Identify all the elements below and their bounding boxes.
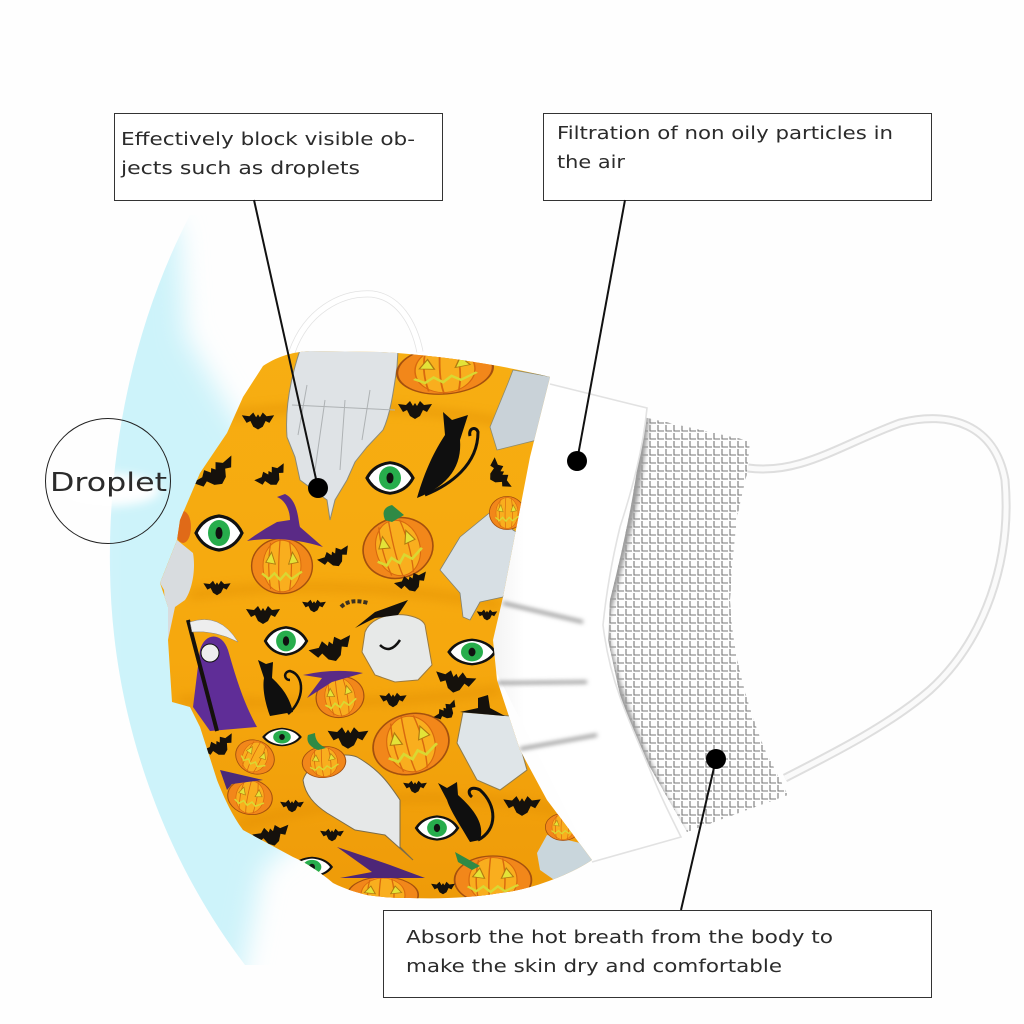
leader line: inner layer [681,749,726,910]
ghost centre closed eye [380,640,400,649]
black cats [417,412,468,498]
callout: absorb: make the skin dry and comfortable [406,956,782,977]
fabric folds [180,407,560,825]
reaper [193,636,257,731]
callout: block droplets [114,114,442,200]
ghost left [160,540,194,640]
white filter layer [480,384,681,862]
callout: block droplets: jects such as droplets [120,158,360,179]
ghost top fold lines [292,385,395,470]
printed mask panel [160,351,592,898]
droplet shield arc [110,226,294,965]
witch hats [247,494,323,547]
pumpkin stems [307,505,480,870]
droplet label: Droplet [50,468,167,498]
pumpkins [252,538,312,594]
eyes [196,516,242,550]
ghost right top [490,370,552,450]
ghost right middle [440,512,516,620]
callout: absorb [384,910,932,998]
callout: absorb: Absorb the hot breath from the body to [406,927,833,948]
white layer pleats [497,603,597,749]
top ear loop [292,294,420,352]
callout: filtration: the air [557,152,626,173]
leader line: filter layer [567,200,625,471]
ghost lower right [457,712,527,790]
ghost lower [303,755,413,860]
ghost corner [537,835,592,880]
grid fabric layer [608,418,787,832]
callout: filtration: Filtration of non oily particles in [557,123,893,144]
pumpkin left edge [177,511,191,543]
ghost top [287,350,398,520]
leader line: outer layer [254,200,328,498]
bats [242,412,274,430]
callout: block droplets: Effectively block visible ob- [121,129,415,150]
ghost centre [362,615,432,682]
callout: filtration [544,114,932,200]
right ear loop [748,419,1006,778]
droplet label [46,418,170,544]
